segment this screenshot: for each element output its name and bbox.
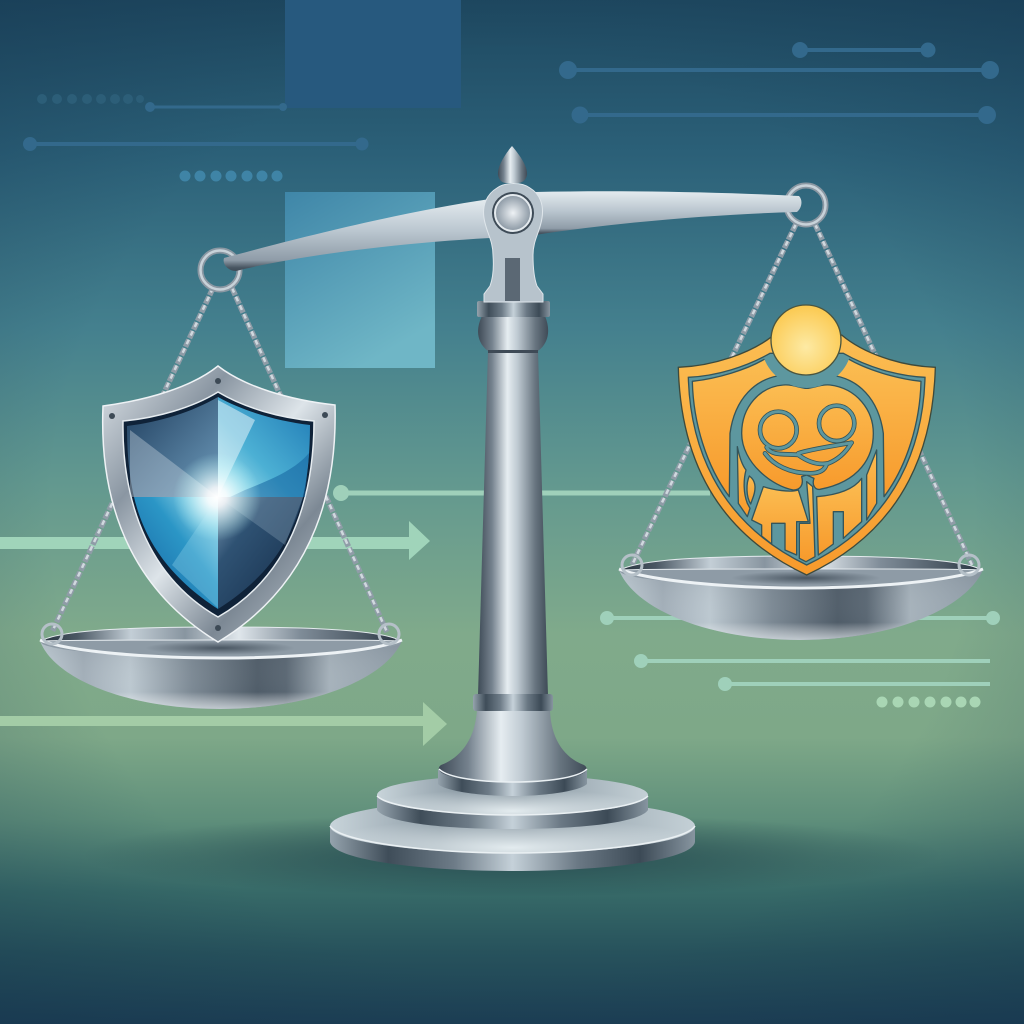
sun collar ring [767,357,846,384]
column collar lower [473,694,553,711]
shield teal inner field [688,353,925,565]
column shaft [478,350,548,696]
base middle disc [377,775,648,829]
sun head circle [771,305,841,375]
background connector lines: blue group [23,42,999,151]
shield body [678,335,935,575]
shield quadrants [127,397,218,497]
left pan [40,624,402,709]
base foot flare [438,710,587,796]
blue security shield [103,366,335,642]
shield metal frame [103,366,335,642]
background square: middle [285,192,435,368]
floor shadow [82,813,942,897]
orange family shield [678,305,935,575]
left ring [200,250,240,290]
right chains [632,224,972,565]
shield center glare [173,453,261,541]
background dots: green row [876,696,980,708]
embracing arms dark outline [760,406,854,473]
left chains [52,288,387,632]
beam [224,146,801,302]
base lower disc [330,799,695,871]
shield inner dark border [123,392,314,617]
background square: top [285,0,461,108]
scale stand [330,301,695,871]
family figure panels [692,358,921,562]
background connector lines: green group [333,485,1000,691]
right ring [786,186,826,224]
background dots: faint row [37,94,144,104]
column collar upper [477,301,550,353]
right pan [619,555,983,640]
background arrow: upper green [0,521,430,560]
finial [498,146,527,183]
shield light facets [130,430,218,497]
beam center pivot [484,184,543,302]
background dots: blue row [180,170,282,182]
embracing arms teal [760,406,854,473]
shield rivets [109,378,328,631]
background arrow: lower green [0,702,447,746]
